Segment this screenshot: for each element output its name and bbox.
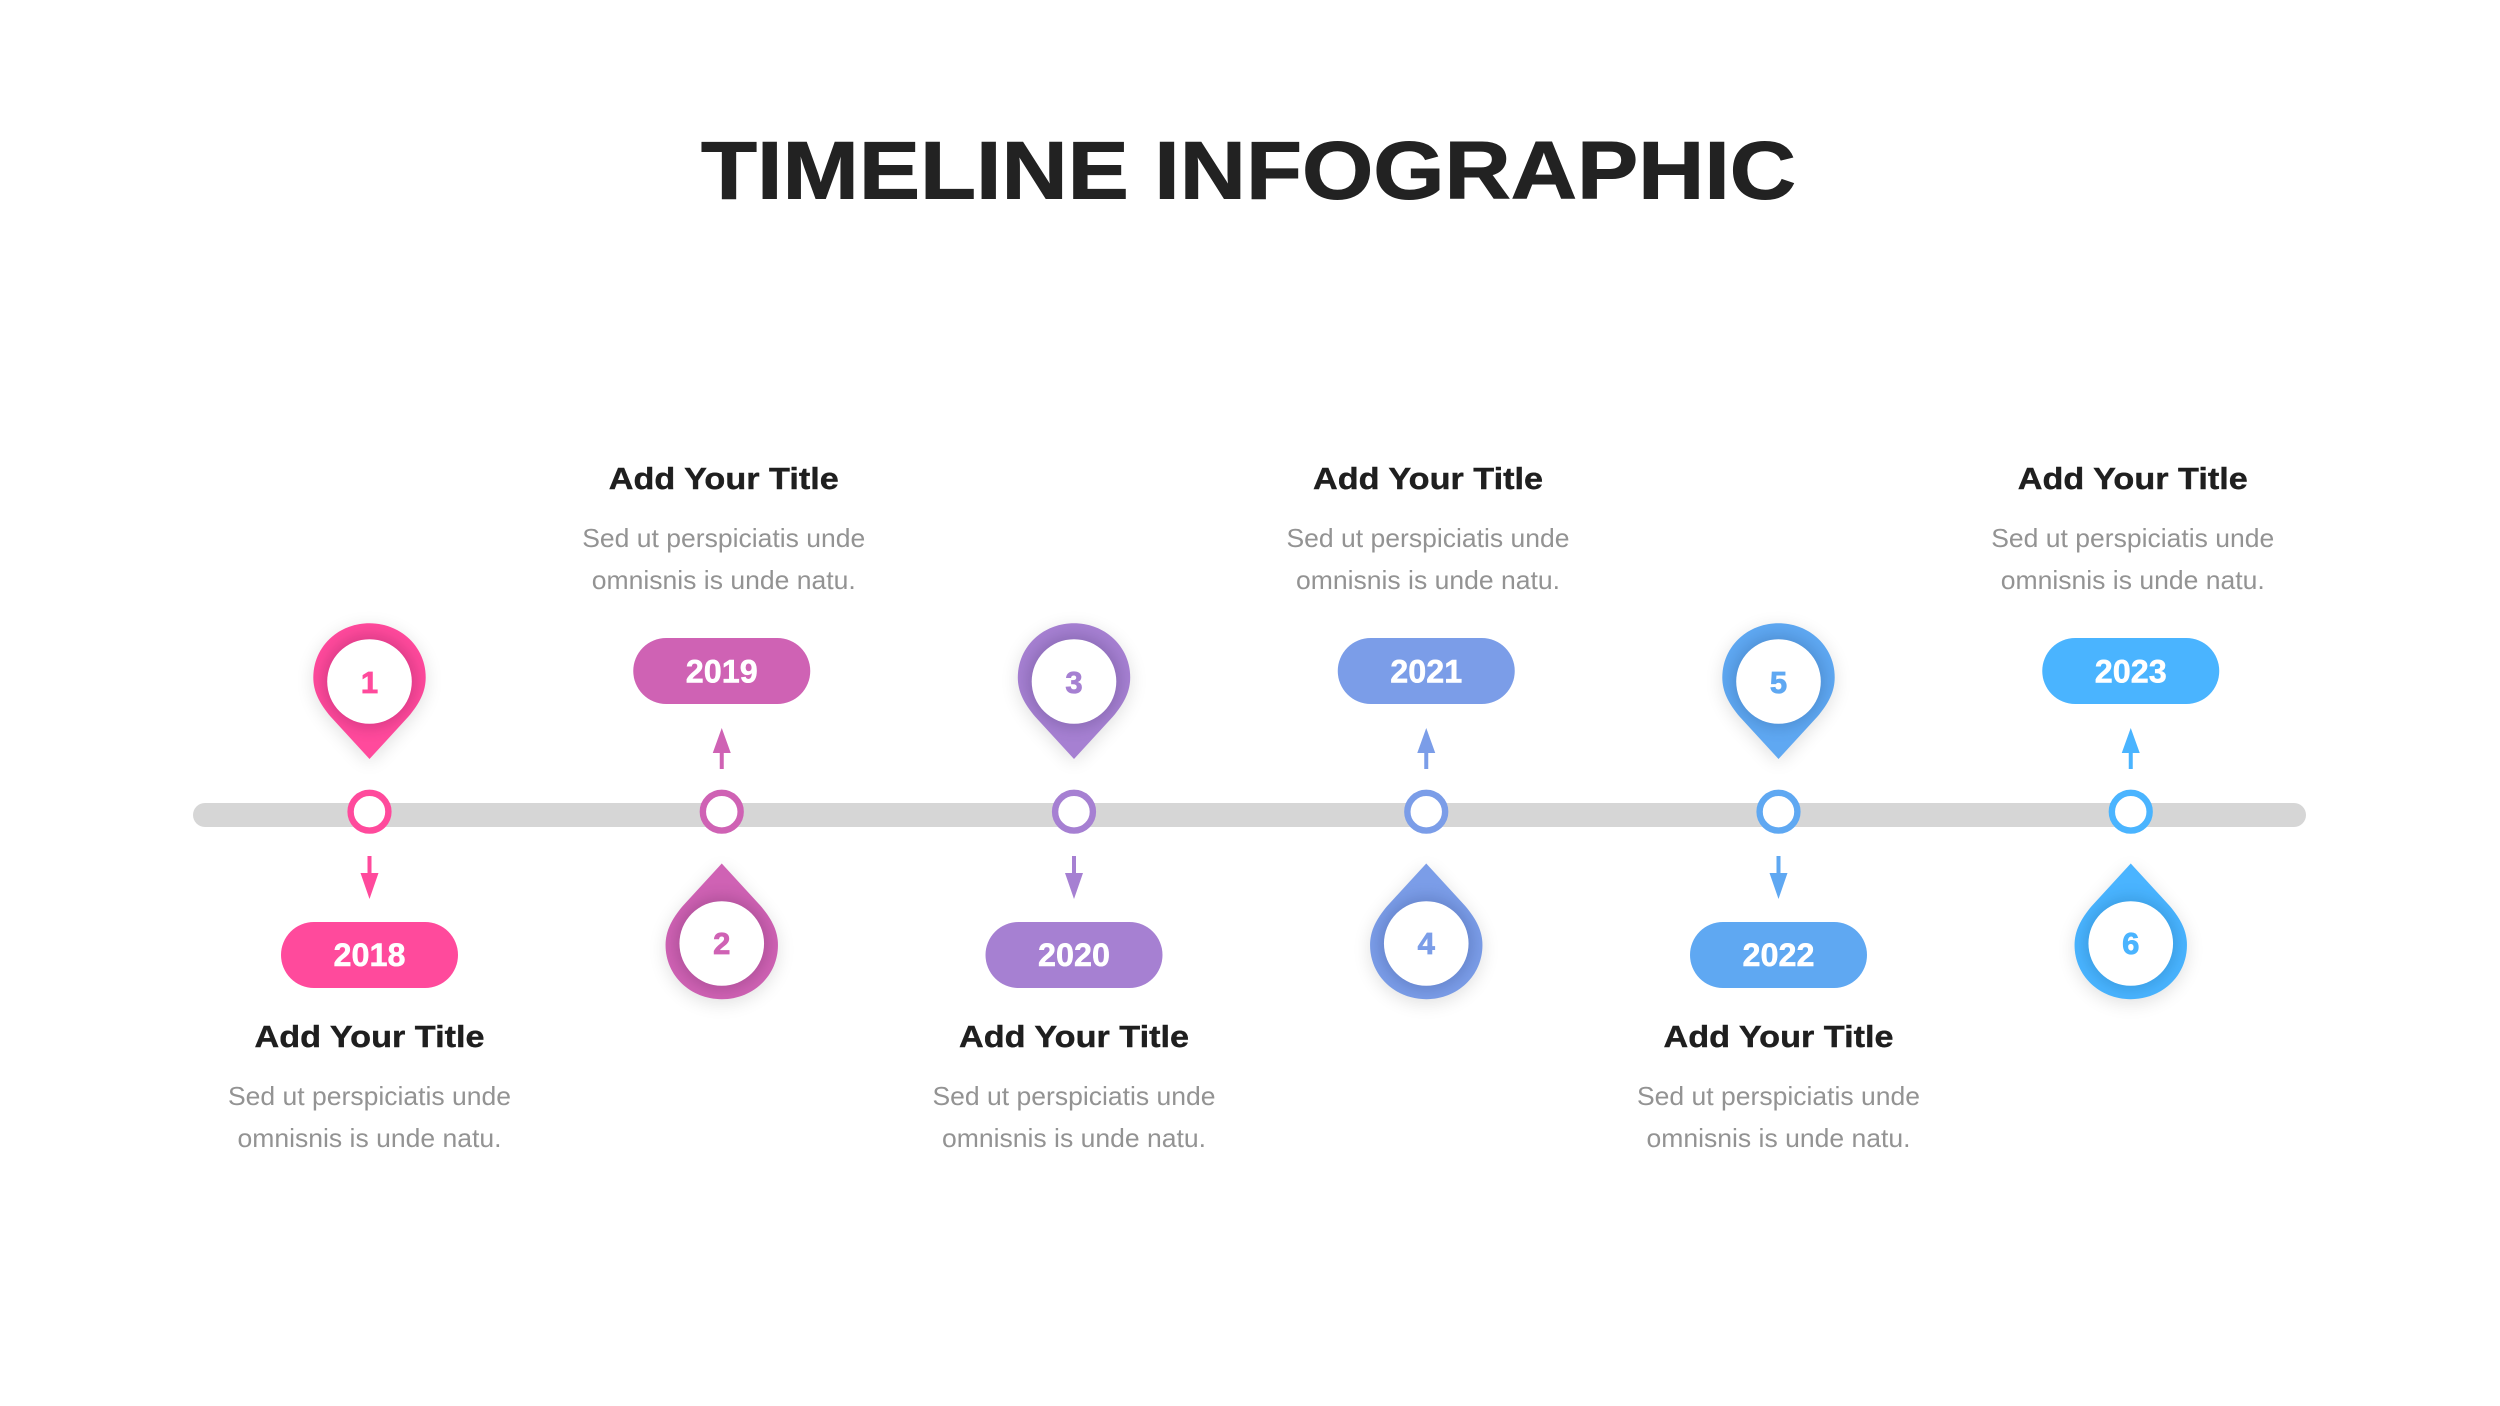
pin 2: [666, 864, 778, 1003]
year pill 2018: 2018: [334, 937, 406, 973]
ring marker 6: [2112, 793, 2150, 831]
year pill 2021: [1338, 638, 1515, 704]
arrow up 2: [713, 728, 731, 769]
milestone 3: 2020: [932, 623, 1216, 1153]
text block 5: Sed ut perspiciatis unde: [1637, 1081, 1920, 1111]
year pill 2023: [2042, 638, 2219, 704]
year pill 2019: 2019: [686, 654, 758, 690]
text block 6: omnisnis is unde natu.: [2001, 565, 2265, 595]
pin 6: [2075, 864, 2187, 1003]
ring marker 1: [351, 793, 388, 831]
milestone 2: 2019: [582, 461, 865, 1003]
ring marker 4: [1407, 793, 1445, 831]
text block 5: [1637, 1019, 1920, 1153]
pin 5: 5: [1770, 665, 1787, 700]
pin 3: 3: [1065, 665, 1083, 700]
arrow up 4: [1417, 728, 1435, 769]
year pill 2021: 2021: [1390, 654, 1462, 690]
text block 4: Sed ut perspiciatis unde: [1286, 523, 1570, 553]
text block 4: Add Your Title: [1313, 461, 1543, 496]
text block 1: [228, 1019, 511, 1153]
text block 1: Sed ut perspiciatis unde: [228, 1081, 511, 1111]
pin 5: [1722, 623, 1835, 763]
text block 4: [1286, 461, 1570, 595]
text block 3: Add Your Title: [959, 1019, 1189, 1054]
text block 2: Sed ut perspiciatis unde: [582, 523, 865, 553]
timeline bar: [193, 803, 2306, 827]
title: TIMELINE INFOGRAPHIC: [701, 126, 1796, 216]
year pill 2018: [281, 922, 458, 988]
text block 6: [1991, 461, 2274, 595]
arrow down 1: [360, 856, 378, 899]
text block 2: Add Your Title: [609, 461, 839, 496]
milestone 6: 2023: [1991, 461, 2274, 1003]
text block 6: Sed ut perspiciatis unde: [1991, 523, 2274, 553]
text block 4: omnisnis is unde natu.: [1296, 565, 1560, 595]
text block 3: Sed ut perspiciatis unde: [932, 1081, 1216, 1111]
text block 5: Add Your Title: [1664, 1019, 1894, 1054]
pin 4: 4: [1418, 926, 1436, 961]
pin 2: 2: [713, 926, 730, 961]
text block 2: [582, 461, 865, 595]
year pill 2022: 2022: [1742, 937, 1814, 973]
pin 4: [1370, 864, 1482, 1003]
text block 5: omnisnis is unde natu.: [1646, 1123, 1910, 1153]
ring marker 2: [703, 793, 741, 831]
text block 1: omnisnis is unde natu.: [238, 1123, 502, 1153]
ring marker 3: [1055, 793, 1093, 831]
year pill 2022: [1690, 922, 1867, 988]
milestone 5: 2022: [1637, 623, 1920, 1153]
ring marker 5: [1760, 793, 1797, 831]
arrow up 6: [2122, 728, 2140, 769]
arrow down 3: [1065, 856, 1083, 899]
pin 1: [313, 623, 426, 763]
text block 3: omnisnis is unde natu.: [942, 1123, 1206, 1153]
milestone 4: 2021: [1286, 461, 1570, 1003]
year pill 2019: [633, 638, 810, 704]
pin 6: 6: [2122, 926, 2139, 961]
text block 3: [932, 1019, 1216, 1153]
year pill 2020: [986, 922, 1162, 988]
year pill 2023: 2023: [2095, 654, 2167, 690]
arrow down 5: [1770, 856, 1788, 899]
milestone 1: 2018: [228, 623, 511, 1153]
year pill 2020: 2020: [1038, 937, 1110, 973]
text block 2: omnisnis is unde natu.: [592, 565, 856, 595]
pin 1: 1: [361, 665, 378, 700]
text block 6: Add Your Title: [2018, 461, 2248, 496]
pin 3: [1018, 623, 1130, 763]
text block 1: Add Your Title: [254, 1019, 484, 1054]
